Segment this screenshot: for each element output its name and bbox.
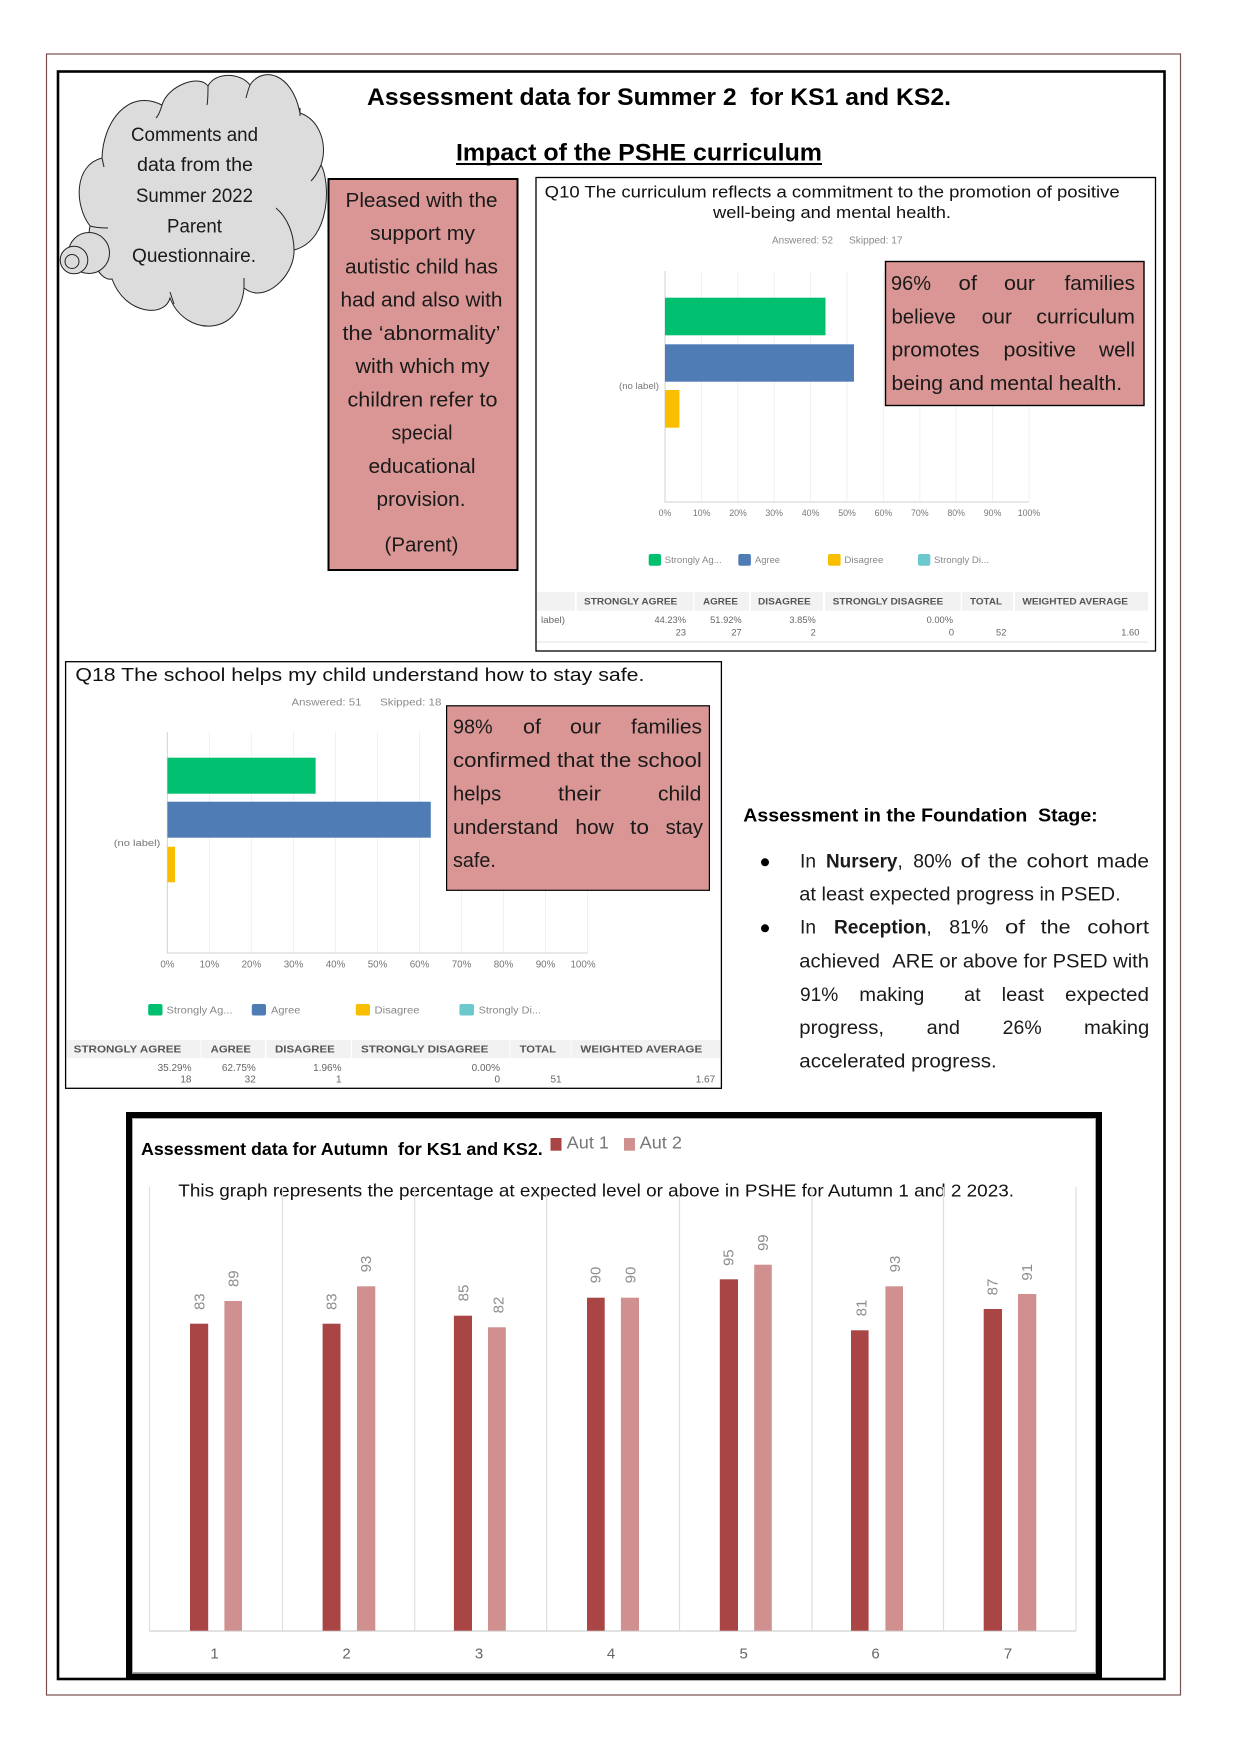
Q10 callout: 96% of families: families bbox=[1064, 273, 1135, 295]
Q10 data table: 27 bbox=[731, 628, 742, 638]
bar chart: percentage at expected level: 83 bbox=[192, 1293, 208, 1310]
bullet: Nursery: 80% bbox=[913, 852, 952, 872]
Q18 bar chart: 60% bbox=[410, 960, 430, 970]
Q10 question heading: Q10 The curriculum reflects a commitment to the promotion of positive bbox=[545, 182, 1120, 202]
bullet: Nursery: the bbox=[988, 852, 1018, 872]
Q10 bar chart: 40% bbox=[802, 508, 820, 518]
bullet: Reception: 26% bbox=[1003, 1018, 1042, 1039]
Q18 bar chart: 0% bbox=[160, 960, 175, 970]
Q10 callout: 96% of families: of bbox=[958, 273, 977, 295]
bullet: Reception: progress, bbox=[799, 1018, 884, 1039]
bar chart: percentage at expected level: 3 bbox=[475, 1646, 483, 1662]
Q18 callout: 98% of families: how bbox=[575, 817, 614, 839]
Q10 data table: DISAGREE bbox=[758, 596, 811, 606]
Q18 data table: 32 bbox=[245, 1074, 256, 1086]
bar chart: percentage at expected level: 4 bbox=[607, 1646, 615, 1662]
thought cloud: comments and data: Summer 2022 bbox=[136, 186, 253, 207]
bullet: Reception: In bbox=[800, 918, 816, 938]
Q10 callout: 96% of families bbox=[886, 262, 1144, 406]
title: Assessment data for Summer 2 for KS1 and KS2. bbox=[367, 84, 951, 111]
Q10 responses count: Answered: 52 bbox=[772, 236, 833, 246]
Q10 data table: 44.23% bbox=[654, 615, 686, 625]
Q18 data table: 0 bbox=[494, 1074, 500, 1086]
bar chart: percentage at expected level: 1 bbox=[210, 1646, 219, 1662]
Q18 callout: 98% of families: confirmed that the school bbox=[453, 750, 702, 772]
Q10 callout: 96% of families: being and mental health. bbox=[892, 373, 1122, 395]
Q18 data table: STRONGLY DISAGREE bbox=[361, 1045, 489, 1056]
bar chart: percentage at expected level: 91 bbox=[1019, 1264, 1036, 1281]
Q10 callout: 96% of families: well bbox=[1098, 340, 1135, 362]
bullet: Reception: Reception, bbox=[834, 918, 932, 938]
Q18 bar chart: 80% bbox=[494, 960, 514, 970]
bar chart: percentage at expected level: 90 bbox=[622, 1267, 640, 1283]
parent quote box: with which my bbox=[354, 356, 490, 378]
Q10 data table: STRONGLY DISAGREE bbox=[833, 596, 943, 606]
bullet: Reception: cohort bbox=[1087, 918, 1150, 938]
bar chart: percentage at expected level: 81 bbox=[853, 1300, 870, 1316]
Q18 data table: 0.00% bbox=[472, 1063, 500, 1074]
bullet: Reception: least bbox=[1002, 985, 1045, 1006]
Q18 bar chart: (no label) bbox=[114, 838, 160, 849]
bullet: Reception: ARE or above for PSED with bbox=[892, 952, 1149, 972]
Q10 callout: 96% of families: our bbox=[982, 306, 1012, 328]
Q10 legend: Strongly Di... bbox=[934, 555, 989, 565]
bar chart: percentage at expected level: 99 bbox=[755, 1234, 772, 1251]
Q18 responses count: Answered: 51 bbox=[292, 696, 362, 708]
bullet: Reception: making bbox=[1084, 1018, 1149, 1039]
Q10 data table: STRONGLY AGREE bbox=[584, 596, 677, 606]
bar chart: percentage at expected level: 83 bbox=[324, 1293, 340, 1310]
Q10 bar chart: 90% bbox=[984, 508, 1002, 518]
bar chart: percentage at expected level: 95 bbox=[720, 1249, 738, 1266]
bullet: Reception bbox=[761, 918, 1150, 1072]
parent quote box: provision. bbox=[376, 489, 466, 511]
Q10 data table: label) bbox=[541, 615, 565, 625]
Q10 bar chart: 0% bbox=[659, 508, 672, 518]
Q18 data table: STRONGLY AGREE bbox=[74, 1045, 182, 1056]
bar chart: percentage at expected level: 89 bbox=[226, 1270, 242, 1287]
Q10 data table: 23 bbox=[676, 628, 686, 638]
bullet: Nursery bbox=[761, 852, 1149, 906]
Q10 callout: 96% of families: curriculum bbox=[1036, 306, 1135, 328]
Q10 bar chart: (no label) bbox=[619, 381, 659, 391]
Q18 question heading: Q18 The school helps my child understand how to stay safe. bbox=[75, 665, 644, 685]
bullet: Nursery: Nursery, bbox=[826, 852, 903, 872]
Q10 callout: 96% of families: believe bbox=[892, 306, 956, 328]
Q18 callout: 98% of families: stay bbox=[666, 817, 703, 839]
Q18 bar chart: 20% bbox=[242, 960, 261, 970]
thought cloud: comments and data: data from the bbox=[137, 155, 253, 176]
bullet: Reception: and bbox=[927, 1018, 960, 1039]
Q10 data table: WEIGHTED AVERAGE bbox=[1022, 596, 1128, 606]
bullet: Reception: the bbox=[1041, 918, 1071, 938]
parent quote box: autistic child has bbox=[345, 256, 498, 278]
thought cloud: comments and data bbox=[60, 75, 326, 326]
Q18 data table: 35.29% bbox=[158, 1063, 192, 1074]
chart legend: Aut 2 bbox=[640, 1133, 682, 1153]
Q10 question heading bbox=[545, 182, 1120, 222]
Q18 data table: 1 bbox=[336, 1074, 342, 1086]
Foundation Stage heading: Assessment in the Foundation Stage: bbox=[743, 805, 1098, 826]
Q18 bar chart: 30% bbox=[284, 960, 304, 970]
panel: Q10 survey chart bbox=[536, 178, 1156, 651]
bar chart: percentage at expected level: 93 bbox=[887, 1256, 904, 1272]
panel: Autumn assessment chart bbox=[129, 1115, 1099, 1676]
Q10 data table: 0.00% bbox=[927, 615, 953, 625]
Q10 bar chart: 70% bbox=[911, 508, 929, 518]
Q10 data table: 51.92% bbox=[710, 615, 742, 625]
Q10 data table: 1.60 bbox=[1121, 628, 1139, 638]
bar chart: percentage at expected level: 7 bbox=[1004, 1646, 1012, 1662]
Q18 bar chart bbox=[114, 732, 596, 970]
chart description: This graph represents the percentage at expected level or above in PSHE for Autumn 1 and 2 2023. bbox=[178, 1181, 1014, 1201]
bar chart: percentage at expected level: 87 bbox=[984, 1279, 1002, 1295]
Q10 legend: Disagree bbox=[844, 555, 883, 565]
Q10 data table: 52 bbox=[996, 628, 1006, 638]
Q10 bar chart: 60% bbox=[875, 508, 892, 518]
Q10 callout: 96% of families: positive bbox=[1004, 340, 1076, 362]
Q10 bar chart: 50% bbox=[838, 508, 856, 518]
chart legend bbox=[550, 1133, 682, 1153]
bar chart: percentage at expected level bbox=[150, 1187, 1076, 1662]
Q18 callout: 98% of families: families bbox=[631, 717, 702, 739]
Q10 callout: 96% of families: 96% bbox=[891, 273, 931, 295]
Q18 bar chart: 100% bbox=[570, 960, 596, 970]
Q10 bar chart: 20% bbox=[729, 508, 747, 518]
Q10 bar chart: 10% bbox=[693, 508, 711, 518]
Q18 data table: 1.67 bbox=[696, 1074, 716, 1086]
bar chart: percentage at expected level: 90 bbox=[588, 1267, 604, 1283]
Q18 legend: Strongly Di... bbox=[479, 1006, 541, 1016]
Q18 legend: Disagree bbox=[374, 1006, 420, 1016]
parent quote box: the ‘abnormality’ bbox=[342, 323, 500, 345]
bullet: Nursery: In bbox=[800, 852, 816, 872]
Q18 legend bbox=[148, 1004, 541, 1016]
bar chart: percentage at expected level: 82 bbox=[490, 1297, 507, 1313]
bullet: Reception: of bbox=[1005, 918, 1026, 938]
bullet: Reception: 81% bbox=[949, 918, 988, 938]
parent quote box: had and also with bbox=[340, 290, 502, 312]
Q18 data table: 1.96% bbox=[313, 1063, 342, 1074]
chart legend: Aut 1 bbox=[567, 1133, 609, 1153]
Q18 data table: 18 bbox=[180, 1074, 192, 1086]
bullet: Nursery: cohort bbox=[1027, 852, 1089, 872]
Q10 question heading: well-being and mental health. bbox=[712, 203, 951, 222]
Q10 data table bbox=[537, 592, 1148, 643]
subtitle: impact of the PSHE curriculum: Impact of the PSHE curriculum bbox=[456, 140, 822, 167]
Q18 data table: AGREE bbox=[211, 1045, 251, 1056]
Q18 responses count: Skipped: 18 bbox=[380, 696, 442, 708]
bar chart: percentage at expected level: 85 bbox=[456, 1285, 472, 1301]
Q10 data table: TOTAL bbox=[970, 596, 1002, 606]
bullet: Reception: making bbox=[859, 985, 924, 1006]
Q18 callout: 98% of families: our bbox=[570, 717, 601, 739]
Q10 callout: 96% of families: our bbox=[1004, 273, 1035, 295]
Q18 callout: 98% of families: of bbox=[523, 717, 541, 739]
Q10 legend: Strongly Ag... bbox=[665, 555, 722, 565]
Q18 data table: WEIGHTED AVERAGE bbox=[580, 1045, 703, 1056]
Q10 bar chart: 30% bbox=[765, 508, 783, 518]
Q18 callout: 98% of families: understand bbox=[453, 817, 558, 839]
Q18 responses count bbox=[292, 696, 442, 708]
bullet: Reception: 91% bbox=[800, 985, 838, 1006]
parent quote box: special bbox=[392, 423, 452, 445]
Q10 bar chart bbox=[619, 271, 1040, 518]
Q18 callout: 98% of families: safe. bbox=[453, 850, 496, 872]
Q18 data table: 62.75% bbox=[222, 1063, 256, 1074]
Q18 callout: 98% of families: helps bbox=[453, 784, 501, 806]
Q18 data table bbox=[67, 1040, 720, 1086]
bullet: Reception: accelerated progress. bbox=[799, 1051, 997, 1072]
Q18 callout: 98% of families: to bbox=[630, 817, 649, 839]
bullet: Nursery: of bbox=[961, 852, 981, 872]
Q18 bar chart: 40% bbox=[326, 960, 346, 970]
parent quote box: Pleased with the bbox=[346, 190, 498, 212]
Q18 callout: 98% of families: their bbox=[558, 784, 601, 806]
Q18 data table: 51 bbox=[550, 1074, 562, 1086]
bullet: Nursery: at least expected progress in PSED. bbox=[799, 884, 1121, 906]
parent quote box: educational bbox=[368, 456, 476, 478]
parent quote box: children refer to bbox=[348, 390, 498, 412]
Q10 data table: 0 bbox=[949, 628, 954, 638]
Q10 callout: 96% of families: promotes bbox=[892, 340, 980, 362]
bar chart: percentage at expected level: 6 bbox=[871, 1646, 880, 1662]
bullet: Reception: achieved bbox=[799, 952, 880, 972]
Q18 bar chart: 10% bbox=[200, 960, 219, 970]
Q10 legend bbox=[649, 554, 989, 566]
bar chart: percentage at expected level: 5 bbox=[740, 1646, 748, 1662]
Q18 bar chart: 90% bbox=[536, 960, 556, 970]
Q10 data table: 2 bbox=[811, 628, 816, 638]
Q18 callout: 98% of families: 98% bbox=[453, 717, 493, 739]
Q18 data table: DISAGREE bbox=[275, 1045, 335, 1056]
Q10 legend: Agree bbox=[755, 555, 780, 565]
chart heading: Assessment data for Autumn for KS1 and KS2. bbox=[141, 1139, 543, 1159]
bullet: Reception: expected bbox=[1065, 985, 1149, 1006]
Q10 responses count: Skipped: 17 bbox=[849, 236, 903, 246]
bar chart: percentage at expected level: 93 bbox=[358, 1256, 375, 1272]
panel: Q18 survey chart bbox=[66, 662, 721, 1088]
panel: assessment in the Foundation Stage bbox=[743, 805, 1150, 1072]
Q18 bar chart: 70% bbox=[452, 960, 472, 970]
Q10 data table: 3.85% bbox=[789, 615, 816, 625]
parent quote box: support my bbox=[370, 223, 475, 245]
thought cloud: comments and data: Parent bbox=[167, 216, 223, 237]
Q18 legend: Agree bbox=[271, 1006, 301, 1016]
parent quote box: (Parent) bbox=[384, 534, 458, 556]
thought cloud: comments and data: Comments and bbox=[131, 125, 258, 146]
Q10 bar chart: 100% bbox=[1018, 508, 1040, 518]
Q18 legend: Strongly Ag... bbox=[166, 1006, 232, 1016]
Q18 callout: 98% of families bbox=[447, 706, 709, 890]
Q18 data table: TOTAL bbox=[520, 1045, 556, 1056]
Q18 callout: 98% of families: child bbox=[658, 784, 701, 806]
Q10 data table: AGREE bbox=[703, 596, 738, 606]
thought cloud: comments and data: Questionnaire. bbox=[132, 246, 256, 267]
parent quote box bbox=[328, 179, 518, 570]
bullet: Nursery: made bbox=[1097, 852, 1149, 872]
bullet: Reception: at bbox=[964, 985, 981, 1006]
Q18 bar chart: 50% bbox=[368, 960, 388, 970]
Q10 responses count bbox=[772, 236, 903, 246]
bar chart: percentage at expected level: 2 bbox=[342, 1646, 351, 1662]
Q10 bar chart: 80% bbox=[947, 508, 965, 518]
